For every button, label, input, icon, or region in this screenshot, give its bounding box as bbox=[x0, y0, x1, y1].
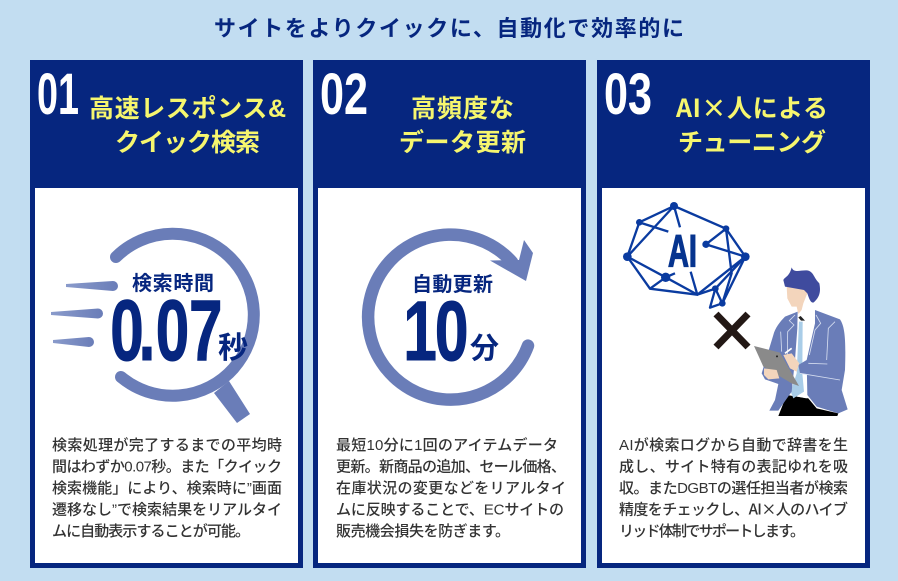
stat: search time 0.07 seconds: 秒 bbox=[218, 332, 248, 365]
icon: magnifier with speed lines bbox=[51, 234, 254, 423]
heading 02: 高頻度な bbox=[411, 95, 514, 123]
body text 01: ムに自動表示することが可能。 bbox=[52, 522, 250, 540]
body text 01: 検索処理が完了するまでの平均時 bbox=[52, 436, 282, 454]
icon: circular refresh arrow bbox=[368, 235, 533, 400]
body text 03: 精度をチェックし、AI×人のハイブ bbox=[619, 498, 848, 520]
panel body background bbox=[602, 188, 865, 563]
heading 03: チューニング bbox=[678, 128, 826, 157]
stat: auto update 10 minutes: 分 bbox=[470, 332, 499, 365]
heading 01 bbox=[89, 95, 286, 157]
body text 02: 最短10分に1回のアイテムデータ bbox=[336, 436, 558, 454]
panel frame bbox=[313, 60, 586, 568]
body text 01: 検索機能」により、検索時に”画面 bbox=[52, 480, 282, 497]
stat: auto update 10 minutes bbox=[403, 273, 499, 378]
heading 02: データ更新 bbox=[399, 128, 526, 157]
body text 01: 間はわずか0.07秒。また「クイック bbox=[52, 458, 282, 476]
icon: AI network bbox=[623, 202, 750, 308]
body text 03 bbox=[619, 436, 848, 540]
body text 03: リッド体制でサポートします。 bbox=[619, 523, 805, 540]
body text 02: 販売機会損失を防ぎます。 bbox=[336, 523, 510, 540]
stat: auto update 10 minutes: 自動更新 bbox=[412, 273, 493, 296]
panel: 01 high-speed response bbox=[30, 60, 303, 568]
heading 03: AI×人による bbox=[675, 89, 828, 125]
heading 02 bbox=[399, 95, 526, 157]
panel body background bbox=[35, 188, 298, 563]
stat: search time 0.07 seconds: 検索時間 bbox=[132, 272, 214, 295]
body text 01 bbox=[52, 436, 282, 540]
panel body background bbox=[318, 188, 581, 563]
body text 03: AIが検索ログから自動で辞書を生 bbox=[619, 436, 848, 454]
panel frame bbox=[30, 60, 303, 568]
body text 02: ムに反映することで、ECサイトの bbox=[336, 502, 564, 518]
heading 01: クイック検索 bbox=[115, 129, 260, 157]
heading 01: 高速レスポンス& bbox=[89, 95, 286, 123]
number 02: 02 bbox=[320, 62, 368, 127]
icon: multiplication cross bbox=[716, 314, 748, 347]
body text 02 bbox=[336, 436, 566, 540]
panel: 02 frequent data updates bbox=[313, 60, 586, 568]
title: サイトをよりクイックに、自動化で効率的に bbox=[214, 16, 684, 41]
icon: AI network: AI bbox=[668, 226, 697, 277]
body text 02: 更新。新商品の追加、セール価格、 bbox=[336, 458, 566, 476]
number 03: 03 bbox=[604, 62, 652, 127]
number 01: 01 bbox=[37, 62, 79, 127]
heading 03 bbox=[675, 89, 828, 157]
body text 03: 収。またDGBTの選任担当者が検索 bbox=[619, 479, 848, 497]
stat: search time 0.07 seconds: 0.07 bbox=[110, 282, 222, 379]
panel frame bbox=[597, 60, 870, 568]
stat: auto update 10 minutes: 10 bbox=[403, 284, 469, 378]
panel: 03 AI and human tuning bbox=[597, 60, 870, 568]
illustration: businessman with tablet bbox=[754, 267, 848, 416]
body text 03: 成し、サイト特有の表記ゆれを吸 bbox=[619, 458, 848, 476]
body text 02: 在庫状況の変更などをリアルタイ bbox=[336, 480, 566, 497]
body text 01: 遷移なし”で検索結果をリアルタイ bbox=[52, 500, 282, 518]
